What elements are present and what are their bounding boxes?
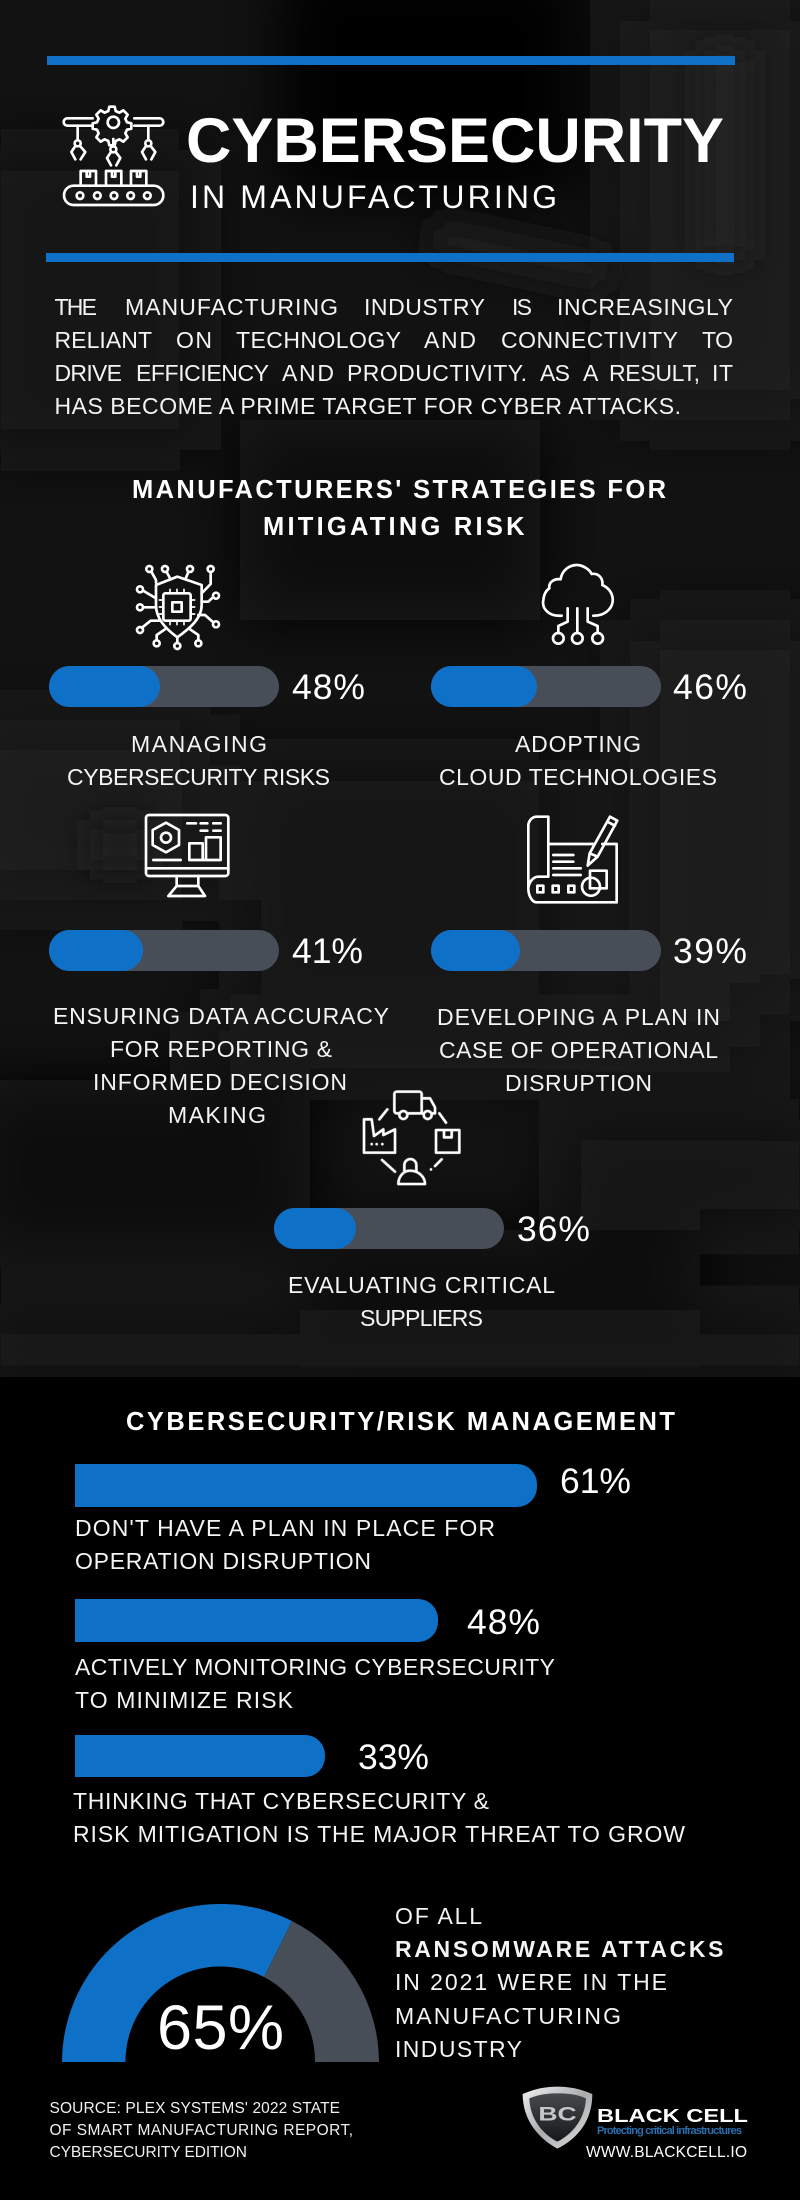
label: ADOPTING <box>515 731 641 757</box>
progress bar 46% <box>431 666 661 707</box>
ransomware statement: IN 2021 WERE IN THE <box>395 1969 667 1995</box>
ransomware statement: INDUSTRY <box>395 2036 522 2062</box>
value 41%: 41% <box>292 931 363 971</box>
label <box>67 731 330 790</box>
intro text block: TECHNOLOGY <box>236 327 401 353</box>
intro text block: MANUFACTURING <box>125 294 338 320</box>
intro text block: INDUSTRY <box>364 294 485 320</box>
value 39%: 39% <box>673 931 747 971</box>
intro text block: INCREASINGLY <box>557 294 733 320</box>
label <box>288 1272 555 1331</box>
heading: strategies: MITIGATING RISK <box>263 513 525 541</box>
label <box>73 1788 685 1847</box>
intro text block: EFFICIENCY <box>136 360 269 386</box>
label <box>75 1654 555 1713</box>
ransomware statement: OF ALL <box>395 1903 482 1929</box>
ransomware statement <box>395 1903 724 2062</box>
icon: monitor dashboard <box>146 815 228 896</box>
logo tagline: Protecting critical infrastructures <box>597 2125 742 2137</box>
progress bar 48% <box>49 666 279 707</box>
header top rule <box>47 56 735 65</box>
label: SUPPLIERS <box>360 1305 483 1331</box>
intro text block: AND <box>424 327 476 353</box>
intro text block: RESULT, <box>609 360 700 386</box>
gauge chart 65% <box>62 1904 379 2063</box>
icon: cloud with circuit nodes <box>543 565 613 644</box>
gauge value: 65% <box>157 1993 284 2063</box>
value 48%: 48% <box>292 667 365 707</box>
icon: shield with chip circuit <box>137 566 219 649</box>
label <box>437 1004 720 1096</box>
label: RISK MITIGATION IS THE MAJOR THREAT TO GROW <box>73 1821 685 1847</box>
intro text block: THE <box>54 294 97 320</box>
value 61%: 61% <box>560 1461 631 1501</box>
intro text block: RELIANT <box>54 327 152 353</box>
source note: CYBERSECURITY EDITION <box>50 2144 247 2161</box>
label: DISRUPTION <box>505 1070 652 1096</box>
label: FOR REPORTING & <box>110 1036 332 1062</box>
value 33%: 33% <box>358 1737 429 1777</box>
horizontal bar 61% <box>75 1464 537 1507</box>
strategy: developing a plan <box>431 817 747 1096</box>
label: DEVELOPING A PLAN IN <box>437 1004 720 1030</box>
icon: factory robot arms and conveyor <box>64 107 163 205</box>
intro text block: TO <box>702 327 733 353</box>
source note: SOURCE: PLEX SYSTEMS' 2022 STATE <box>50 2100 340 2117</box>
strategy: evaluating critical suppliers <box>274 1092 590 1331</box>
intro text block: DRIVE <box>54 360 122 386</box>
value 36%: 36% <box>517 1209 590 1249</box>
value 48%: 48% <box>467 1602 540 1642</box>
label: ENSURING DATA ACCURACY <box>53 1003 389 1029</box>
label: CLOUD TECHNOLOGIES <box>439 764 717 790</box>
intro text block: A <box>583 360 599 386</box>
stat: 33% major threat <box>73 1735 685 1847</box>
label <box>439 731 717 790</box>
heading: risk management: CYBERSECURITY/RISK MANAGEMENT <box>126 1408 675 1436</box>
label: EVALUATING CRITICAL <box>288 1272 555 1298</box>
subtitle: IN MANUFACTURING <box>190 179 557 215</box>
label: ACTIVELY MONITORING CYBERSECURITY <box>75 1654 555 1680</box>
label: CYBERSECURITY RISKS <box>67 764 330 790</box>
logo wordmark: BLACK CELL <box>597 2106 748 2126</box>
icon: supply chain cycle <box>364 1092 459 1184</box>
strategy: adopting cloud technologies <box>431 565 747 790</box>
strategy: ensuring data accuracy <box>49 815 389 1128</box>
intro text block: HAS BECOME A PRIME TARGET FOR CYBER ATTACKS. <box>54 393 681 419</box>
panel: dark factory photo background <box>0 0 800 1390</box>
stat: 61% no plan <box>75 1461 631 1574</box>
intro text block: IS <box>512 294 532 320</box>
title: CYBERSECURITY <box>186 106 724 176</box>
progress bar 39% <box>431 930 661 971</box>
ransomware statement: RANSOMWARE ATTACKS <box>395 1936 724 1962</box>
icon: blueprint plan and pencil <box>528 817 617 902</box>
website: WWW.BLACKCELL.IO <box>586 2144 747 2161</box>
source note: OF SMART MANUFACTURING REPORT, <box>50 2122 353 2139</box>
label: MANAGING <box>131 731 267 757</box>
icon: shield logo <box>523 2087 592 2149</box>
label: INFORMED DECISION <box>93 1069 347 1095</box>
value 46%: 46% <box>673 667 747 707</box>
label: DON'T HAVE A PLAN IN PLACE FOR <box>75 1515 495 1541</box>
source note <box>50 2100 353 2161</box>
strategy: managing cybersecurity risks <box>49 566 365 790</box>
header bottom rule <box>46 253 734 262</box>
intro text block: AS <box>540 360 570 386</box>
intro text block <box>54 294 733 419</box>
intro text block: IT <box>712 360 733 386</box>
heading: strategies <box>132 476 666 541</box>
intro text block: AND <box>282 360 334 386</box>
horizontal bar 48% <box>75 1599 438 1642</box>
heading: strategies: MANUFACTURERS' STRATEGIES FOR <box>132 476 666 504</box>
label: OPERATION DISRUPTION <box>75 1548 371 1574</box>
intro text block: ON <box>176 327 212 353</box>
label: MAKING <box>168 1102 266 1128</box>
label <box>53 1003 389 1128</box>
stat: 48% monitoring <box>75 1599 555 1713</box>
intro text block: CONNECTIVITY <box>501 327 678 353</box>
label <box>75 1515 495 1574</box>
label: THINKING THAT CYBERSECURITY & <box>73 1788 489 1814</box>
intro text block: PRODUCTIVITY. <box>347 360 527 386</box>
progress bar 41% <box>49 930 279 971</box>
logo: Black Cell <box>523 2087 748 2161</box>
progress bar 36% <box>274 1208 504 1249</box>
icon: shield logo: BC <box>538 2105 577 2126</box>
ransomware statement: MANUFACTURING <box>395 2003 621 2029</box>
label: CASE OF OPERATIONAL <box>439 1037 718 1063</box>
horizontal bar 33% <box>75 1735 325 1777</box>
label: TO MINIMIZE RISK <box>75 1687 294 1713</box>
